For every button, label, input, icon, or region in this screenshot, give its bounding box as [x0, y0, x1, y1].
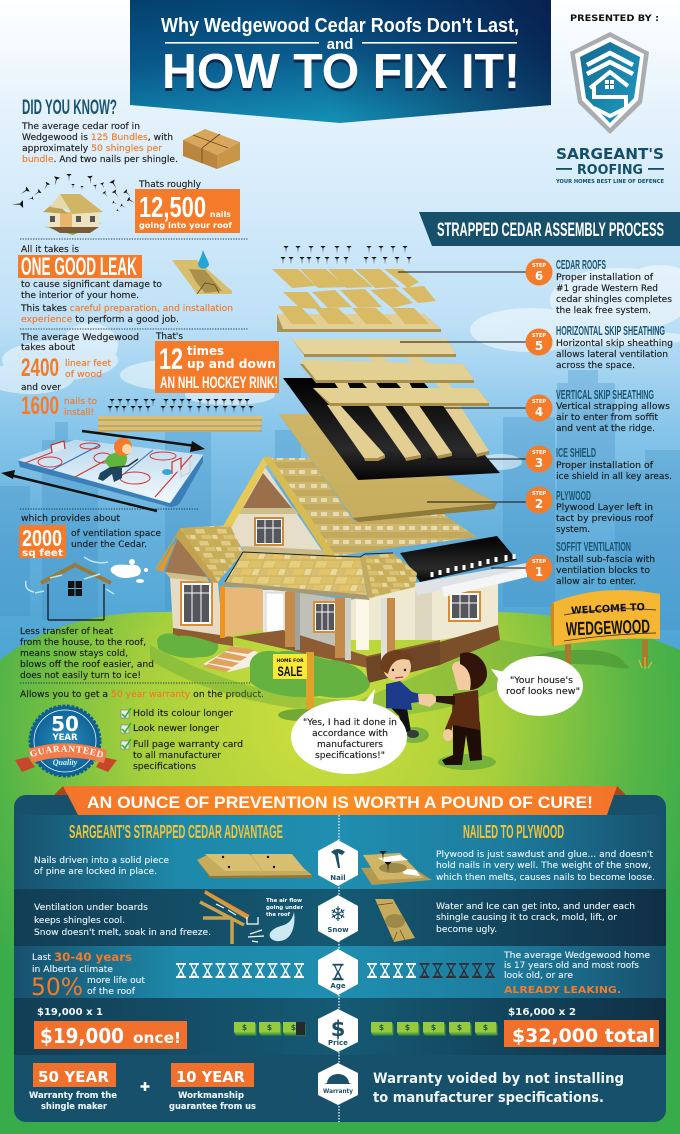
text: damage: This takes careful preparation, and installation: [20, 304, 233, 314]
row: nail right text: [436, 850, 655, 883]
banner: an ounce of prevention: AN OUNCE OF PREVENTION IS WORTH A POUND OF CURE!: [87, 793, 593, 812]
checklist: to all manufacturer: [133, 751, 221, 761]
hexagon: age: Age: [330, 982, 346, 990]
step 1: soffit ventilation: allow air to enter.: [556, 577, 636, 587]
row: age right text: ALREADY LEAKING.: [504, 985, 621, 996]
hockey rink illustration: [18, 438, 203, 507]
step 3: ice shield: [526, 445, 672, 482]
text: warranty: Allows you to get a 50 year warranty on the product.: [20, 690, 264, 700]
text: less transfer of heat: means snow stays cold,: [20, 649, 128, 659]
left shingled roof: [180, 525, 243, 582]
text: ventilation space: which provides about: [21, 514, 120, 524]
text: bundles: approximately 50 shingles per: [22, 144, 162, 154]
hexagon: price: Price: [328, 1039, 348, 1047]
step 6: cedar roofs: 6: [535, 269, 543, 283]
icon: cracked shingle: [375, 899, 415, 942]
main roof with rafters: [263, 458, 477, 557]
logo wordmark: SARGEANT'S: [556, 145, 664, 163]
title banner: [130, 0, 551, 123]
icon: air flow under roof diagram: the roof: [266, 912, 291, 918]
text: takes about: The average Wedgewood: [20, 333, 139, 343]
callout: 12,500 nails: [135, 189, 240, 233]
stat: 1600 nails: 1600: [21, 392, 59, 420]
ground shadow: [150, 640, 560, 715]
hourglasses: 4 of 10: [367, 963, 495, 978]
logo wordmark: ROOFING: [577, 163, 643, 178]
stat: 2400 linear feet: of wood: [65, 370, 102, 380]
step 6: cedar roofs: the leak free system.: [556, 306, 651, 316]
step 5: horizontal skip sheathing: allows lateral ventilation: [556, 350, 668, 360]
steps list: [398, 257, 673, 587]
row: nail left text: of pine are locked in place.: [34, 867, 157, 877]
row: age left text: [31, 950, 145, 1001]
sign: welcome to wedgewood: WELCOME TO: [571, 602, 645, 617]
right window: [448, 591, 481, 622]
text: damage: experience to perform a good job.: [21, 315, 179, 325]
callout: 12 times up and down: [155, 341, 279, 393]
callout: 12,500 nails: nails: [210, 210, 232, 219]
speech bubble: yes I had it done: [291, 689, 407, 774]
black ice shield on soffit: [400, 536, 517, 582]
step 2: plywood: system.: [556, 525, 590, 535]
text: less transfer of heat: [20, 627, 154, 681]
step 3: ice shield: STEP: [532, 450, 546, 456]
plywood front edge over roof: [353, 503, 497, 522]
step 6: cedar roofs: #1 grade Western Red: [556, 284, 658, 294]
text: takes about: takes about: [21, 343, 75, 353]
clouds: [0, 265, 680, 470]
step 6: cedar roofs: cedar shingles completes: [556, 295, 672, 305]
text: bundles: The average cedar roof in: [21, 122, 140, 132]
bushes: [157, 633, 218, 658]
row: snow left text: Snow doesn't melt, soak in and freeze.: [34, 928, 211, 938]
row: age left text: 50%: [31, 973, 83, 1001]
fascia and soffit: [415, 563, 527, 595]
checklist: Hold its colour longer: [133, 709, 233, 719]
icon: shingle bundle box: [183, 129, 240, 169]
row: snow right text: shingle causing it to crack, mold, lift, or: [436, 913, 617, 923]
text: takes about: [20, 333, 139, 353]
row: warranty 50 year: [29, 1063, 117, 1112]
left gable: [165, 538, 207, 577]
nails row above lumber: [107, 399, 254, 414]
speech bubble: your house's roof looks new: [491, 656, 583, 716]
step 4: vertical skip sheathing: [526, 387, 670, 434]
sign: home for sale: HOME FOR: [276, 658, 304, 664]
title banner: HOW TO FIX IT!: [162, 45, 520, 99]
callout: 2000 sq feet: sq feet: [22, 548, 63, 559]
row: snow right text: Water and Ice can get into, and under each: [436, 902, 635, 912]
text: thats roughly: Thats roughly: [138, 180, 202, 190]
callout: 12 times up and down: AN NHL HOCKEY RINK!: [160, 373, 278, 392]
row: price left: [34, 1007, 187, 1049]
step 1: soffit ventilation: Install sub-fascia with: [556, 555, 655, 565]
porch deck: [233, 630, 440, 668]
stat: 2400 linear feet: linear feet: [65, 359, 111, 369]
porch shingled roof: [225, 552, 367, 595]
row: warranty right text: Warranty voided by not installing: [373, 1071, 624, 1087]
logo: Sargeant's Roofing shield: [570, 32, 649, 134]
step 4: vertical skip sheathing: air to enter from soffit: [556, 413, 658, 423]
step 2: plywood: Plywood Layer left in: [556, 503, 653, 513]
layer 6: nails above shingles: [280, 246, 412, 264]
row: price right: $32,000 total: [512, 1025, 655, 1047]
row: nail right text: Plywood is just sawdust and glue... and doesn't: [436, 850, 653, 860]
row: warranty 10 year: [169, 1063, 256, 1112]
callout: 12 times up and down: up and down: [187, 357, 276, 371]
speech bubble: your house's roof looks new: "Your house's: [510, 676, 573, 686]
row: warranty 50 year: 50 YEAR: [38, 1068, 109, 1086]
heading: did you know: DID YOU KNOW?: [22, 96, 117, 119]
right wing wall: [350, 583, 498, 640]
row: nail left text: Nails driven into a solid piece: [34, 856, 169, 866]
step 6: cedar roofs: CEDAR ROOFS: [556, 257, 606, 272]
stat: 2400 linear feet: 2400: [21, 354, 59, 382]
left wing wall: [170, 577, 223, 637]
callout: 12 times up and down: 12: [159, 343, 183, 376]
arrow: top of rink: [82, 431, 205, 452]
row: warranty 50 year: Warranty from the: [29, 1091, 117, 1101]
title banner: and: [327, 36, 353, 53]
character: man in blue: [380, 650, 438, 743]
step 5: horizontal skip sheathing: 5: [535, 339, 543, 353]
row: snow right text: become ugly.: [436, 925, 497, 935]
layer 5: horizontal skip sheathing: [292, 339, 489, 406]
arrow: bottom of rink: [1, 470, 157, 511]
row: snow left text: keeps shingles cool.: [34, 916, 125, 926]
step 1: soffit ventilation: STEP: [532, 559, 546, 565]
house illustration: [150, 456, 560, 715]
badge: 50 year guaranteed: 50: [51, 712, 79, 736]
row: age left text: in Alberta climate: [32, 965, 113, 975]
hourglasses: 10 full: [176, 963, 304, 978]
text: of ventilation: under the Cedar.: [71, 540, 147, 550]
left window: [180, 581, 213, 626]
hexagon: snow: ❄: [330, 902, 346, 926]
banner: an ounce of prevention: [54, 786, 626, 815]
icon: 5 money stacks: [371, 1022, 498, 1036]
row: price left: $19,000: [40, 1024, 124, 1048]
step 2: plywood: PLYWOOD: [556, 488, 591, 503]
row: warranty right text: to manufacturer specifications.: [373, 1090, 604, 1106]
row: price right: [504, 1007, 659, 1047]
step 3: ice shield: ice shield in all key areas.: [556, 472, 672, 482]
step 4: vertical skip sheathing: Vertical strapping allows: [556, 402, 670, 412]
row: age right text: is 17 years old and most roofs: [504, 961, 639, 971]
row: snow left text: Ventilation under boards: [34, 903, 148, 913]
steps: [203, 646, 258, 672]
icon: air flow under roof diagram: The air flow: [266, 898, 303, 904]
icon: leaking shingle: [172, 250, 232, 294]
row backgrounds: [14, 815, 666, 1055]
icon: small house: [43, 194, 103, 235]
sign: home for sale: [273, 652, 322, 721]
hexagon: warranty: Warranty: [323, 1087, 354, 1095]
icon: lumber stack: [98, 416, 262, 432]
step 6: cedar roofs: [526, 257, 672, 316]
sign: home for sale: SALE: [278, 663, 302, 679]
row: warranty 10 year: 10 YEAR: [176, 1068, 245, 1086]
logo wordmark: YOUR HOMES BEST LINE OF DEFENCE: [555, 179, 665, 185]
row: age right text: [503, 951, 650, 996]
heading: strapped cedar advantage: SARGEANT'S STRAPPED CEDAR ADVANTAGE: [69, 822, 283, 842]
callout: 2000 sq feet: 2000: [22, 525, 62, 551]
row: age right text: The average Wedgewood home: [503, 951, 650, 961]
text: and over: and over: [21, 383, 61, 393]
callout: 2000 sq feet: [19, 525, 66, 559]
step 4: vertical skip sheathing: 4: [535, 405, 543, 419]
row: age left text: of the roof: [87, 987, 136, 997]
hexagon: nail: Nail: [330, 874, 346, 882]
text: of ventilation: of ventilation space: [71, 529, 161, 539]
row: warranty 10 year: Workmanship: [178, 1091, 245, 1101]
icon: solid planks with nails: [197, 854, 312, 878]
right hip roof: [360, 553, 417, 598]
callout: 12,500 nails: 12,500: [139, 192, 206, 224]
upper window: [254, 517, 284, 546]
icon: 3 money stacks: [234, 1022, 306, 1036]
layer 2: plywood: [279, 414, 497, 522]
step 2: plywood: [526, 486, 654, 535]
hexagon: age: [318, 949, 358, 995]
row: price right: $16,000 x 2: [508, 1007, 576, 1018]
callout: one good leak: [18, 253, 142, 281]
layer 3: ice shield: [283, 378, 500, 480]
row: warranty 10 year: guarantee from us: [169, 1102, 256, 1112]
text: that's: That's: [155, 332, 183, 342]
callout: one good leak: ONE GOOD LEAK: [21, 253, 137, 281]
row: age left text: more life out: [87, 976, 145, 986]
checklist: [121, 708, 243, 772]
hexagon: snow: [318, 895, 358, 942]
heading: nailed to plywood: NAILED TO PLYWOOD: [463, 822, 564, 842]
checklist: Look newer longer: [133, 724, 219, 734]
step 5: horizontal skip sheathing: [526, 323, 673, 371]
row: warranty 50 year: shingle maker: [41, 1102, 108, 1112]
columns: [285, 592, 395, 662]
text: of ventilation: [71, 529, 161, 550]
step 1: soffit ventilation: 1: [535, 565, 543, 579]
step 6: cedar roofs: Proper installation of: [556, 273, 654, 283]
step 3: ice shield: Proper installation of: [556, 461, 654, 471]
layer 4: vertical strapping: [321, 356, 489, 458]
icon: air flow under roof diagram: [200, 891, 304, 944]
door and porch walls: [263, 590, 287, 632]
step 4: vertical skip sheathing: STEP: [532, 399, 546, 405]
step 1: soffit ventilation: [526, 539, 655, 587]
text: all it takes: All it takes is: [21, 245, 79, 255]
row: age left text: Last: [32, 953, 51, 963]
stat: 1600 nails: install!: [64, 408, 94, 418]
callout: 12,500 nails: going into your roof: [139, 221, 233, 230]
heading band: strapped cedar assembly process: [419, 212, 680, 246]
title banner: Why Wedgewood Cedar Roofs Don't Last,: [161, 15, 519, 37]
hexagon: snow: Snow: [327, 926, 349, 934]
stat: 1600 nails: nails to: [64, 397, 97, 407]
city skyline: [0, 370, 680, 630]
text: damage: the interior of your home.: [21, 291, 139, 301]
text: less transfer of heat: Less transfer of heat: [20, 627, 113, 637]
speech bubble: yes I had it done: manufacturers: [317, 740, 383, 750]
text: damage: to cause significant damage to: [21, 280, 162, 290]
speech bubble: yes I had it done: accordance with: [312, 729, 388, 739]
row: price left: once!: [133, 1029, 181, 1047]
icon: ventilated house and snow: [26, 557, 148, 620]
badge: 50 year guaranteed: YEAR: [51, 733, 78, 743]
step 6: cedar roofs: STEP: [532, 263, 546, 269]
presented by label: PRESENTED BY :: [570, 14, 659, 24]
badge: 50 year guaranteed: [15, 704, 117, 778]
step 4: vertical skip sheathing: and vent at the ridge.: [556, 424, 655, 434]
row: warranty right text: [373, 1071, 624, 1106]
row: age left text: 30-40 years: [54, 950, 132, 964]
step 1: soffit ventilation: ventilation blocks to: [556, 566, 650, 576]
upper gable wall: [228, 467, 323, 552]
step 5: horizontal skip sheathing: STEP: [532, 333, 546, 339]
row: price left: $19,000 x 1: [37, 1007, 103, 1018]
speech bubble: yes I had it done: "Yes, I had it done in: [303, 718, 397, 728]
speech bubble: your house's roof looks new: roof looks new": [506, 687, 580, 697]
step 2: plywood: tact by previous roof: [556, 514, 654, 524]
row: snow left text: [34, 903, 211, 938]
checklist: Full page warranty card: [133, 740, 243, 750]
callout: 12 times up and down: times: [187, 344, 224, 358]
row: nail right text: which then melts, causes nails to become loose.: [436, 873, 655, 883]
row: nail right text: hold nails in very well. The weight of the snow,: [436, 861, 651, 871]
hexagon: price: $: [331, 1017, 345, 1041]
icon: nails flying around house: [12, 174, 136, 213]
step 3: ice shield: 3: [535, 456, 543, 470]
text: less transfer of heat: from the house, to the roof,: [20, 638, 146, 648]
plus sign: [140, 1082, 150, 1091]
exploded roof layers: [272, 246, 500, 522]
text: bundles: [21, 122, 178, 165]
sign: welcome to wedgewood: [517, 590, 660, 669]
step 2: plywood: 2: [535, 497, 543, 511]
step 5: horizontal skip sheathing: across the space.: [556, 361, 635, 371]
step 2: plywood: STEP: [532, 491, 546, 497]
text: less transfer of heat: blows off the roof easier, and: [20, 660, 154, 670]
checklist: specifications: [133, 762, 196, 772]
hexagon: nail: [318, 840, 358, 886]
title banner: HOW TO FIX IT!: [162, 48, 520, 102]
row: nail right icon: [361, 851, 432, 885]
layer 6: cedar shingles: [272, 269, 441, 332]
text: bundles: Wedgewood is 125 Bundles, with: [22, 133, 173, 143]
speech bubble: yes I had it done: specifications!": [315, 751, 385, 761]
step 3: ice shield: ICE SHIELD: [556, 445, 596, 460]
text: damage: [20, 280, 233, 325]
hexagon: price: [318, 1009, 358, 1052]
green hill: [0, 612, 680, 1134]
logo wordmark: [555, 145, 665, 185]
text: less transfer of heat: does not easily turn to ice!: [20, 671, 141, 681]
character: man in brown jacket: [436, 652, 496, 770]
row: nail left text: [34, 856, 169, 877]
hexagon: warranty: [318, 1063, 358, 1105]
stat: 2400 linear feet: [21, 354, 111, 382]
step 5: horizontal skip sheathing: Horizontal skip sheathing: [556, 339, 673, 349]
badge: 50 year guaranteed: GUARANTEED: [30, 746, 104, 758]
text: bundles: bundle. And two nails per shingle.: [22, 155, 178, 165]
badge: 50 year guaranteed: Quality: [53, 758, 78, 767]
panel: comparison: [14, 786, 666, 1122]
icon: air flow under roof diagram: going under: [266, 905, 304, 911]
row: age right text: look old, or are: [504, 971, 573, 981]
row: snow right text: [436, 902, 635, 935]
